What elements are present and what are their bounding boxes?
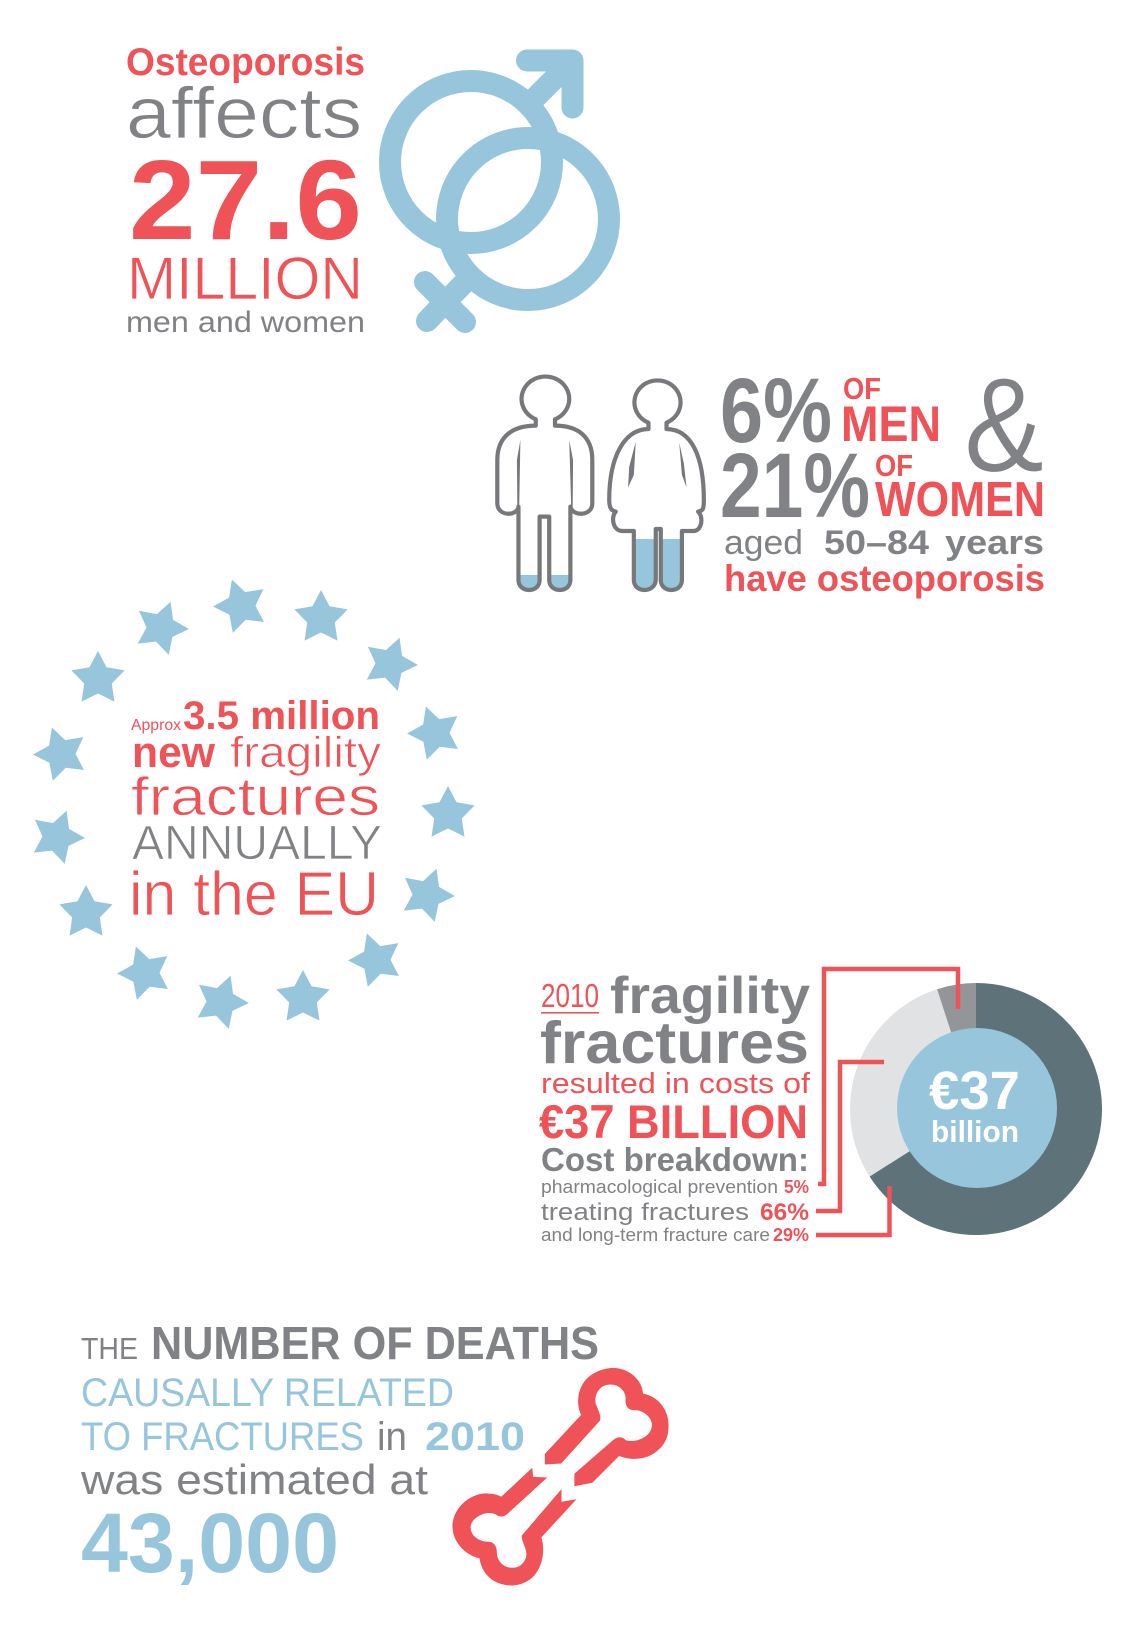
value: 66%: 66% xyxy=(760,1199,809,1226)
panel: fragility fractures in the EU xyxy=(24,571,475,1032)
text: CAUSALLY RELATED: CAUSALLY RELATED xyxy=(81,1371,454,1415)
panel: 27.6 million affected xyxy=(126,41,609,339)
text: Approx: Approx xyxy=(131,717,181,734)
stat: 3.5 million: 3.5 million xyxy=(183,694,380,738)
text: 2010: 2010 xyxy=(541,977,599,1014)
underline of 2010 xyxy=(541,1012,599,1014)
text: fragility: fragility xyxy=(230,728,381,777)
stat: 43,000: 43,000 xyxy=(81,1496,339,1590)
text: treating fractures: treating fractures xyxy=(541,1199,749,1226)
text: affects: affects xyxy=(126,74,362,154)
text: new: new xyxy=(132,728,216,777)
stat: 6%: 6% xyxy=(720,360,832,462)
icon: ring of EU stars xyxy=(24,571,475,1032)
value: 5%: 5% xyxy=(784,1177,809,1197)
text: was estimated at: was estimated at xyxy=(80,1456,428,1503)
number: 27.6: 27.6 xyxy=(129,137,362,263)
hub label: billion: billion xyxy=(931,1114,1019,1149)
label: MEN: MEN xyxy=(841,396,941,452)
heading: NUMBER OF DEATHS: NUMBER OF DEATHS xyxy=(151,1317,599,1369)
text: men and women: men and women xyxy=(126,306,365,339)
text: in: in xyxy=(377,1415,407,1459)
panel: deaths xyxy=(80,1317,668,1590)
text: years: years xyxy=(945,524,1044,562)
heading: fragility: fragility xyxy=(610,967,810,1025)
hub value: €37: €37 xyxy=(929,1061,1020,1121)
value: 29%: 29% xyxy=(773,1225,809,1245)
text: ANNUALLY: ANNUALLY xyxy=(132,817,382,870)
text: in the EU: in the EU xyxy=(129,860,379,929)
text: 50–84: 50–84 xyxy=(824,524,929,562)
icon: broken bone xyxy=(453,1368,668,1585)
text: fractures: fractures xyxy=(131,767,380,827)
panel: prevalence in men and women xyxy=(497,351,1045,599)
stat: €37 BILLION: €37 BILLION xyxy=(539,1095,808,1148)
heading: fractures: fractures xyxy=(540,1010,809,1076)
text: and long-term fracture care: and long-term fracture care xyxy=(541,1225,770,1245)
stat: 21%: 21% xyxy=(720,435,870,537)
text: 2010: 2010 xyxy=(425,1415,525,1459)
text: THE: THE xyxy=(81,1331,138,1366)
icon: interlocked male and female symbols xyxy=(390,60,609,322)
heading: Osteoporosis: Osteoporosis xyxy=(126,41,365,84)
text: resulted in costs of: resulted in costs of xyxy=(541,1068,811,1100)
panel: cost of fragility fractures xyxy=(539,967,1102,1245)
icon: man and woman outlines filled to prevalence level xyxy=(497,377,704,590)
label: OF: OF xyxy=(843,371,881,406)
ampersand: & xyxy=(964,351,1044,500)
text: aged: aged xyxy=(724,524,803,562)
leader lines from breakdown to donut xyxy=(816,969,958,1235)
text: Cost breakdown: Cost breakdown: xyxy=(541,1141,809,1178)
label: WOMEN: WOMEN xyxy=(875,473,1045,527)
label: OF: OF xyxy=(875,448,913,483)
text: have osteoporosis: have osteoporosis xyxy=(724,558,1045,599)
text: MILLION: MILLION xyxy=(127,245,363,312)
text: pharmacological prevention: pharmacological prevention xyxy=(541,1177,778,1197)
text: TO FRACTURES: TO FRACTURES xyxy=(81,1415,364,1459)
chart: cost donut xyxy=(850,983,1102,1235)
